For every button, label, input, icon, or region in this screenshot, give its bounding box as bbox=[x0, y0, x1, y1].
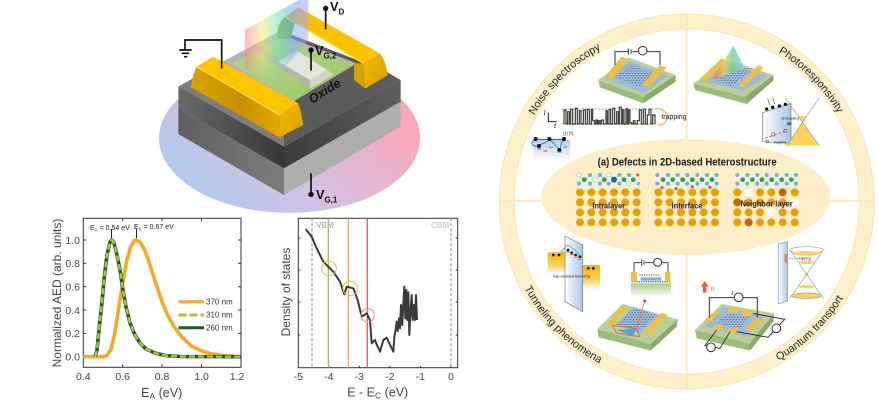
diagram: interface: Interface bbox=[672, 201, 703, 210]
drain electrode bbox=[277, 7, 388, 89]
chart: trapping noise trace: I bbox=[544, 108, 546, 117]
diagram: interface bbox=[654, 173, 719, 226]
peak annotation 0.67 eV bbox=[134, 224, 174, 238]
y tick labels: 0.0 bbox=[65, 352, 80, 364]
x tick labels bbox=[294, 371, 454, 383]
legend: 370 nm bbox=[206, 298, 233, 306]
label: Noise spectroscopy: Noise spectroscopy bbox=[528, 44, 600, 115]
y tick labels: 1.0 bbox=[65, 235, 80, 247]
x tick labels: -2 bbox=[385, 371, 395, 383]
chart: trapping noise trace: t bbox=[554, 121, 557, 130]
VBM and CBM dashed lines bbox=[312, 218, 451, 368]
icon: Hall bar device: I bbox=[731, 290, 733, 297]
diagram: Dirac cone with trapping: trapping bbox=[799, 257, 811, 261]
curve: 310 nm bbox=[95, 240, 241, 357]
diagram: photogating band structure: trapping bbox=[774, 140, 786, 144]
terminal VG2 bbox=[308, 44, 337, 71]
label: Oxide: Oxide bbox=[306, 76, 343, 107]
heading: (a) Defects in 2D-based Heterostructure bbox=[598, 157, 777, 169]
label: Photoresponsivity: Photoresponsivity bbox=[779, 46, 843, 112]
x axis title: C bbox=[375, 390, 381, 400]
x axis title: E - E bbox=[347, 386, 375, 400]
quadrant dividers bbox=[500, 14, 873, 389]
label: Tunneling phenomena: Tunneling phenomena bbox=[526, 284, 601, 364]
terminal VD: V bbox=[330, 0, 338, 14]
terminal VG2: V bbox=[315, 44, 323, 58]
top gate bbox=[253, 46, 333, 89]
icon: device with tip bbox=[597, 300, 678, 351]
x tick labels: -1 bbox=[416, 371, 425, 383]
terminal VG1: G,1 bbox=[324, 195, 338, 204]
x axis title: A bbox=[149, 391, 155, 401]
legend: 260 nm bbox=[206, 324, 233, 332]
plot frame and ticks bbox=[83, 218, 241, 367]
icon: magnetic field arrow: B bbox=[709, 286, 715, 293]
central ellipse bbox=[542, 139, 830, 255]
legend bbox=[178, 298, 233, 332]
oxide layer bbox=[232, 37, 354, 101]
curve: 260 nm bbox=[95, 240, 241, 357]
diagram: trap-assisted tunneling: trap-assisted tunneling bbox=[553, 274, 590, 278]
central defects panel bbox=[542, 139, 830, 255]
x axis title: E bbox=[141, 386, 149, 400]
chart: density of states bbox=[279, 218, 458, 400]
quadrant: photoresponsivity bbox=[693, 46, 819, 146]
background ellipse bbox=[159, 63, 420, 213]
chart: trapping noise trace: trapping bbox=[661, 114, 687, 121]
panel: defects wheel bbox=[498, 14, 875, 390]
VBM label: VBM bbox=[316, 221, 334, 230]
ground terminal bbox=[179, 40, 222, 68]
marker line: red bbox=[366, 218, 368, 368]
diagram: carrier drift bbox=[532, 130, 574, 162]
terminal VG2: G,2 bbox=[323, 51, 337, 60]
diagram: intralayer: Intralayer bbox=[592, 201, 625, 210]
x tick labels bbox=[76, 371, 244, 383]
x tick labels: 0.4 bbox=[76, 371, 91, 383]
chart: normalized AED vs EA bbox=[50, 218, 244, 401]
x tick labels: 1.0 bbox=[194, 371, 209, 383]
peak annotation 0.54 eV: A bbox=[95, 228, 98, 232]
y axis title: Density of states bbox=[279, 248, 293, 336]
peak annotation 0.54 eV bbox=[90, 225, 130, 238]
y tick labels: 0.8 bbox=[65, 258, 80, 270]
quadrant: quantum transport bbox=[695, 242, 823, 352]
peak annotation 0.67 eV: A bbox=[139, 226, 142, 232]
diagram: photogating band structure bbox=[763, 97, 819, 146]
y tick labels: 0.4 bbox=[65, 305, 80, 317]
x tick labels: 0 bbox=[448, 371, 454, 383]
peak annotation 0.67 eV: E bbox=[134, 224, 139, 231]
diagram: photogating band structure: photogating bbox=[782, 116, 799, 120]
source electrode bbox=[191, 57, 303, 137]
x tick labels: -3 bbox=[355, 371, 364, 383]
x tick labels: 0.6 bbox=[115, 371, 130, 383]
terminal VD bbox=[323, 0, 344, 29]
device stack bbox=[178, 0, 401, 204]
quadrant: noise spectroscopy bbox=[532, 46, 687, 162]
quadrant: tunneling phenomena bbox=[548, 236, 678, 351]
terminal VG1: V bbox=[316, 188, 324, 202]
terminal VD: D bbox=[338, 7, 344, 16]
x tick labels: 1.2 bbox=[230, 371, 244, 383]
marker line: olive bbox=[327, 218, 329, 368]
panel: transistor device illustration bbox=[159, 0, 420, 213]
diagram: cross-section with circuit bbox=[631, 258, 671, 297]
diagram: neighbor layer bbox=[733, 173, 799, 226]
y tick labels: 0.2 bbox=[65, 328, 80, 340]
peak annotation 0.54 eV: E bbox=[90, 225, 95, 232]
x tick labels: 0.8 bbox=[155, 371, 170, 383]
peak annotation 0.54 eV: = 0.54 eV bbox=[98, 225, 130, 232]
legend: 310 nm bbox=[206, 310, 233, 320]
label: Quantum transport: Quantum transport bbox=[776, 295, 844, 360]
y tick labels: 0.6 bbox=[65, 282, 80, 294]
CBM label: CBM bbox=[431, 221, 450, 230]
diagram: carrier drift: drift bbox=[563, 130, 574, 137]
y tick labels bbox=[65, 235, 80, 364]
peak annotation 0.67 eV: = 0.67 eV bbox=[142, 224, 174, 231]
chart: trapping noise trace bbox=[544, 107, 687, 130]
rainbow light beam bbox=[245, 0, 308, 80]
icon: device with light cone bbox=[693, 46, 773, 104]
x tick labels: -5 bbox=[294, 371, 303, 383]
plot frame and ticks bbox=[298, 218, 458, 368]
x axis title: (eV) bbox=[381, 386, 408, 400]
x tick labels: -4 bbox=[324, 371, 334, 383]
marker line: orange bbox=[347, 218, 349, 368]
diagram: intralayer bbox=[576, 173, 641, 226]
x axis title: (eV) bbox=[155, 386, 182, 400]
curve: 370 nm bbox=[83, 240, 241, 357]
icon: device with circuit bbox=[598, 46, 676, 103]
diagram: neighbor layer: Neighbor layer bbox=[741, 200, 793, 209]
y axis title: Normalized AED (arb. units) bbox=[50, 219, 64, 367]
outer ring bbox=[507, 22, 867, 382]
terminal VG1 bbox=[308, 173, 338, 204]
DOS curve bbox=[306, 229, 417, 352]
